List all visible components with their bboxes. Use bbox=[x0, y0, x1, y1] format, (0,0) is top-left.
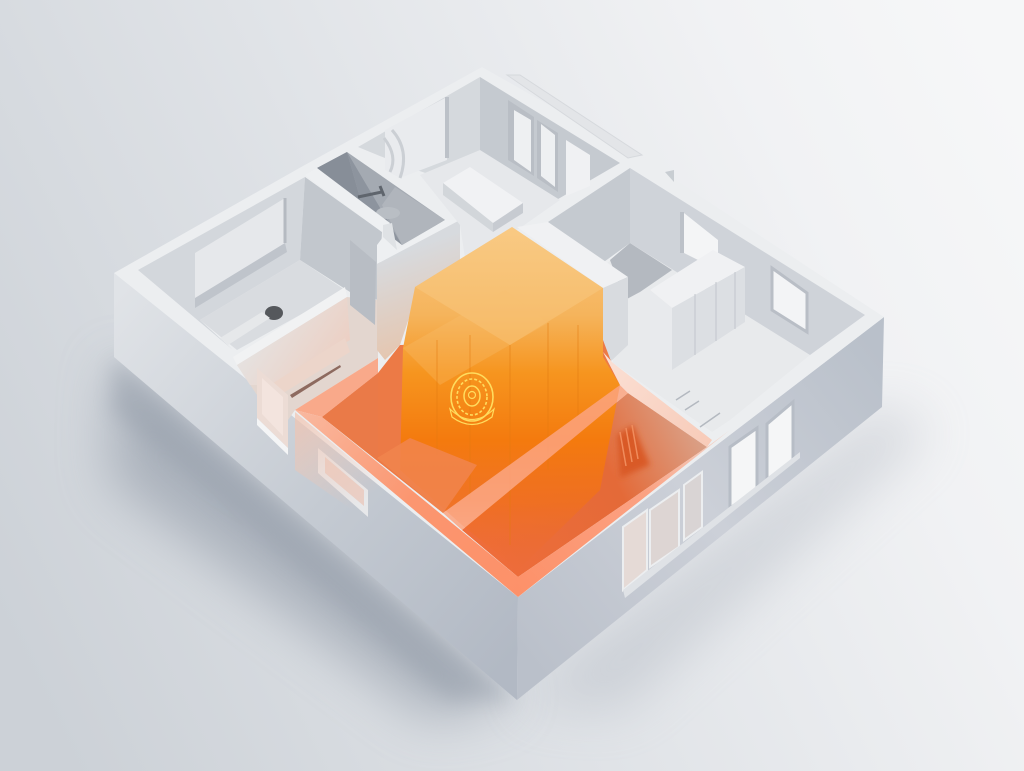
window bbox=[195, 198, 285, 300]
pale glass area bbox=[237, 297, 378, 420]
floor bbox=[605, 243, 810, 432]
cabinet bbox=[650, 250, 745, 370]
vent slot outside bbox=[507, 75, 642, 158]
inner column shades bbox=[437, 323, 578, 545]
front-left strip bbox=[295, 410, 518, 597]
bedroom one floor bbox=[377, 438, 477, 513]
front-right windows bbox=[623, 402, 800, 598]
back wall bbox=[138, 177, 305, 350]
wall plate bbox=[377, 220, 460, 264]
orange heat column bbox=[400, 227, 620, 570]
left corner wall bbox=[548, 168, 630, 272]
bathroom bbox=[305, 152, 460, 360]
right room bbox=[517, 168, 865, 432]
bedroom one walls bbox=[322, 340, 620, 513]
floor shadow bbox=[110, 357, 930, 720]
recessed entry bbox=[257, 368, 288, 455]
left room bbox=[138, 177, 382, 420]
glowing emblem bbox=[450, 373, 494, 424]
bench bbox=[443, 167, 523, 223]
orange bedrooms bbox=[322, 340, 707, 577]
steps bbox=[676, 391, 720, 427]
wall top plate bbox=[114, 67, 884, 597]
divider strip bbox=[443, 385, 628, 530]
radiator bbox=[617, 425, 650, 478]
floor bbox=[200, 260, 345, 350]
soft heat fade on the wall bbox=[295, 412, 518, 625]
fixture bbox=[358, 186, 384, 197]
robot object bbox=[265, 306, 283, 320]
right outer wall bbox=[517, 317, 884, 700]
window panes bbox=[508, 100, 534, 176]
left outer wall bbox=[114, 273, 518, 700]
low partition bbox=[233, 287, 347, 365]
front-left window bbox=[318, 448, 368, 517]
front-right strip bbox=[518, 430, 730, 597]
door bbox=[350, 240, 376, 325]
bedroom two bbox=[462, 393, 707, 577]
divider strip bbox=[305, 168, 390, 232]
building shell bbox=[114, 67, 884, 700]
tubes bbox=[384, 130, 404, 178]
floor bbox=[420, 150, 560, 258]
window behind cabinet bbox=[684, 213, 718, 270]
right wall bbox=[480, 77, 620, 202]
window bbox=[772, 268, 807, 332]
upper box faces bbox=[415, 227, 603, 345]
side wall bbox=[300, 177, 382, 300]
pier face bbox=[377, 220, 460, 360]
back wall bbox=[630, 168, 865, 355]
wall shade bbox=[322, 373, 378, 458]
top-left salmon strip bbox=[295, 358, 378, 417]
back room bbox=[358, 77, 620, 258]
rear strip bbox=[603, 352, 712, 447]
orange trims bbox=[295, 352, 730, 597]
shaft bbox=[317, 152, 445, 245]
thick wall block bbox=[517, 222, 628, 288]
back-left wall bbox=[358, 77, 480, 178]
